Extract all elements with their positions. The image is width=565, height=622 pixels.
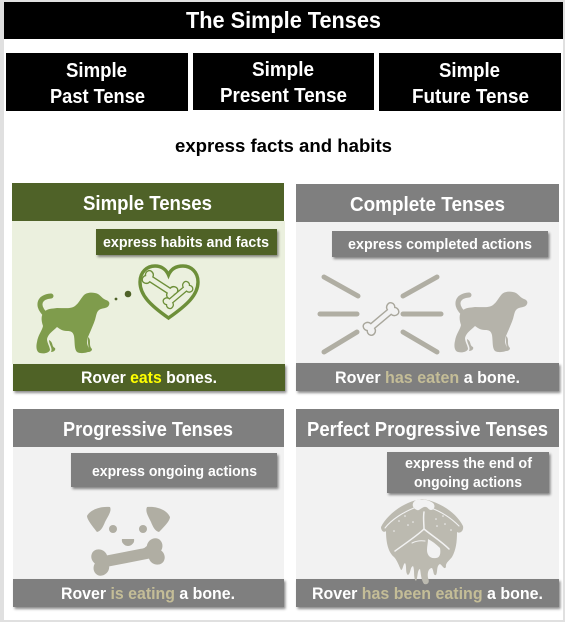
example sentence bar [296,363,559,391]
callout: express the end of ongoing actions: ongoing actions [414,475,522,491]
panel: simple tenses [12,183,285,391]
tense box: simple present [193,53,374,110]
panel: perfect progressive tenses [296,409,559,607]
example sentence bar: Rover has eaten a bone. [335,368,520,387]
icon: radiating lines [320,277,441,352]
tense box: simple past: Simple [66,60,127,82]
icon: drooling dog face [381,499,463,584]
callout: express completed actions: express completed actions [348,237,532,253]
heading: complete tenses: Complete Tenses [350,194,505,216]
tense box: simple present: Simple [252,59,314,81]
icon: grey dog [454,292,527,352]
panel: progressive tenses [13,409,284,607]
tense box: simple past [6,53,188,111]
title [4,2,563,39]
tense box: simple future [379,53,561,111]
icon: thought dots [115,291,131,300]
callout: express the end of ongoing actions [387,452,549,493]
icon: bone outline [362,301,400,337]
icon: puppy with bone [87,507,170,577]
heading: simple tenses [12,183,284,221]
example sentence bar [296,579,559,607]
example sentence bar: Rover eats bones. [81,368,217,387]
heading: progressive tenses [13,409,284,447]
heading: perfect progressive tenses [296,409,559,447]
callout: express habits and facts [96,229,277,255]
heading: perfect progressive tenses: Perfect Progressive Tenses [307,419,548,441]
example sentence bar [13,364,285,391]
callout: express the end of ongoing actions: express the end of [405,456,532,472]
example sentence bar [13,579,284,607]
subtitle: express facts and habits [175,136,392,156]
example sentence bar: Rover has been eating a bone. [312,584,543,603]
callout: express completed actions [332,231,548,257]
title: The Simple Tenses [186,7,381,33]
panel: complete tenses [296,184,559,391]
heading: simple tenses: Simple Tenses [83,193,212,215]
icon: heart with bones [140,266,198,318]
example sentence bar: Rover is eating a bone. [61,584,235,603]
callout: express habits and facts: express habits and facts [103,235,269,251]
heading: progressive tenses: Progressive Tenses [63,419,233,441]
callout: express ongoing actions: express ongoing actions [92,464,257,480]
tense box: simple present: Present Tense [220,85,347,107]
icon: green dog [36,293,109,353]
callout: express ongoing actions [71,453,277,487]
tense box: simple future: Simple [439,60,500,82]
tense box: simple past: Past Tense [50,86,145,108]
heading: complete tenses [296,184,559,222]
tense box: simple future: Future Tense [412,86,529,108]
